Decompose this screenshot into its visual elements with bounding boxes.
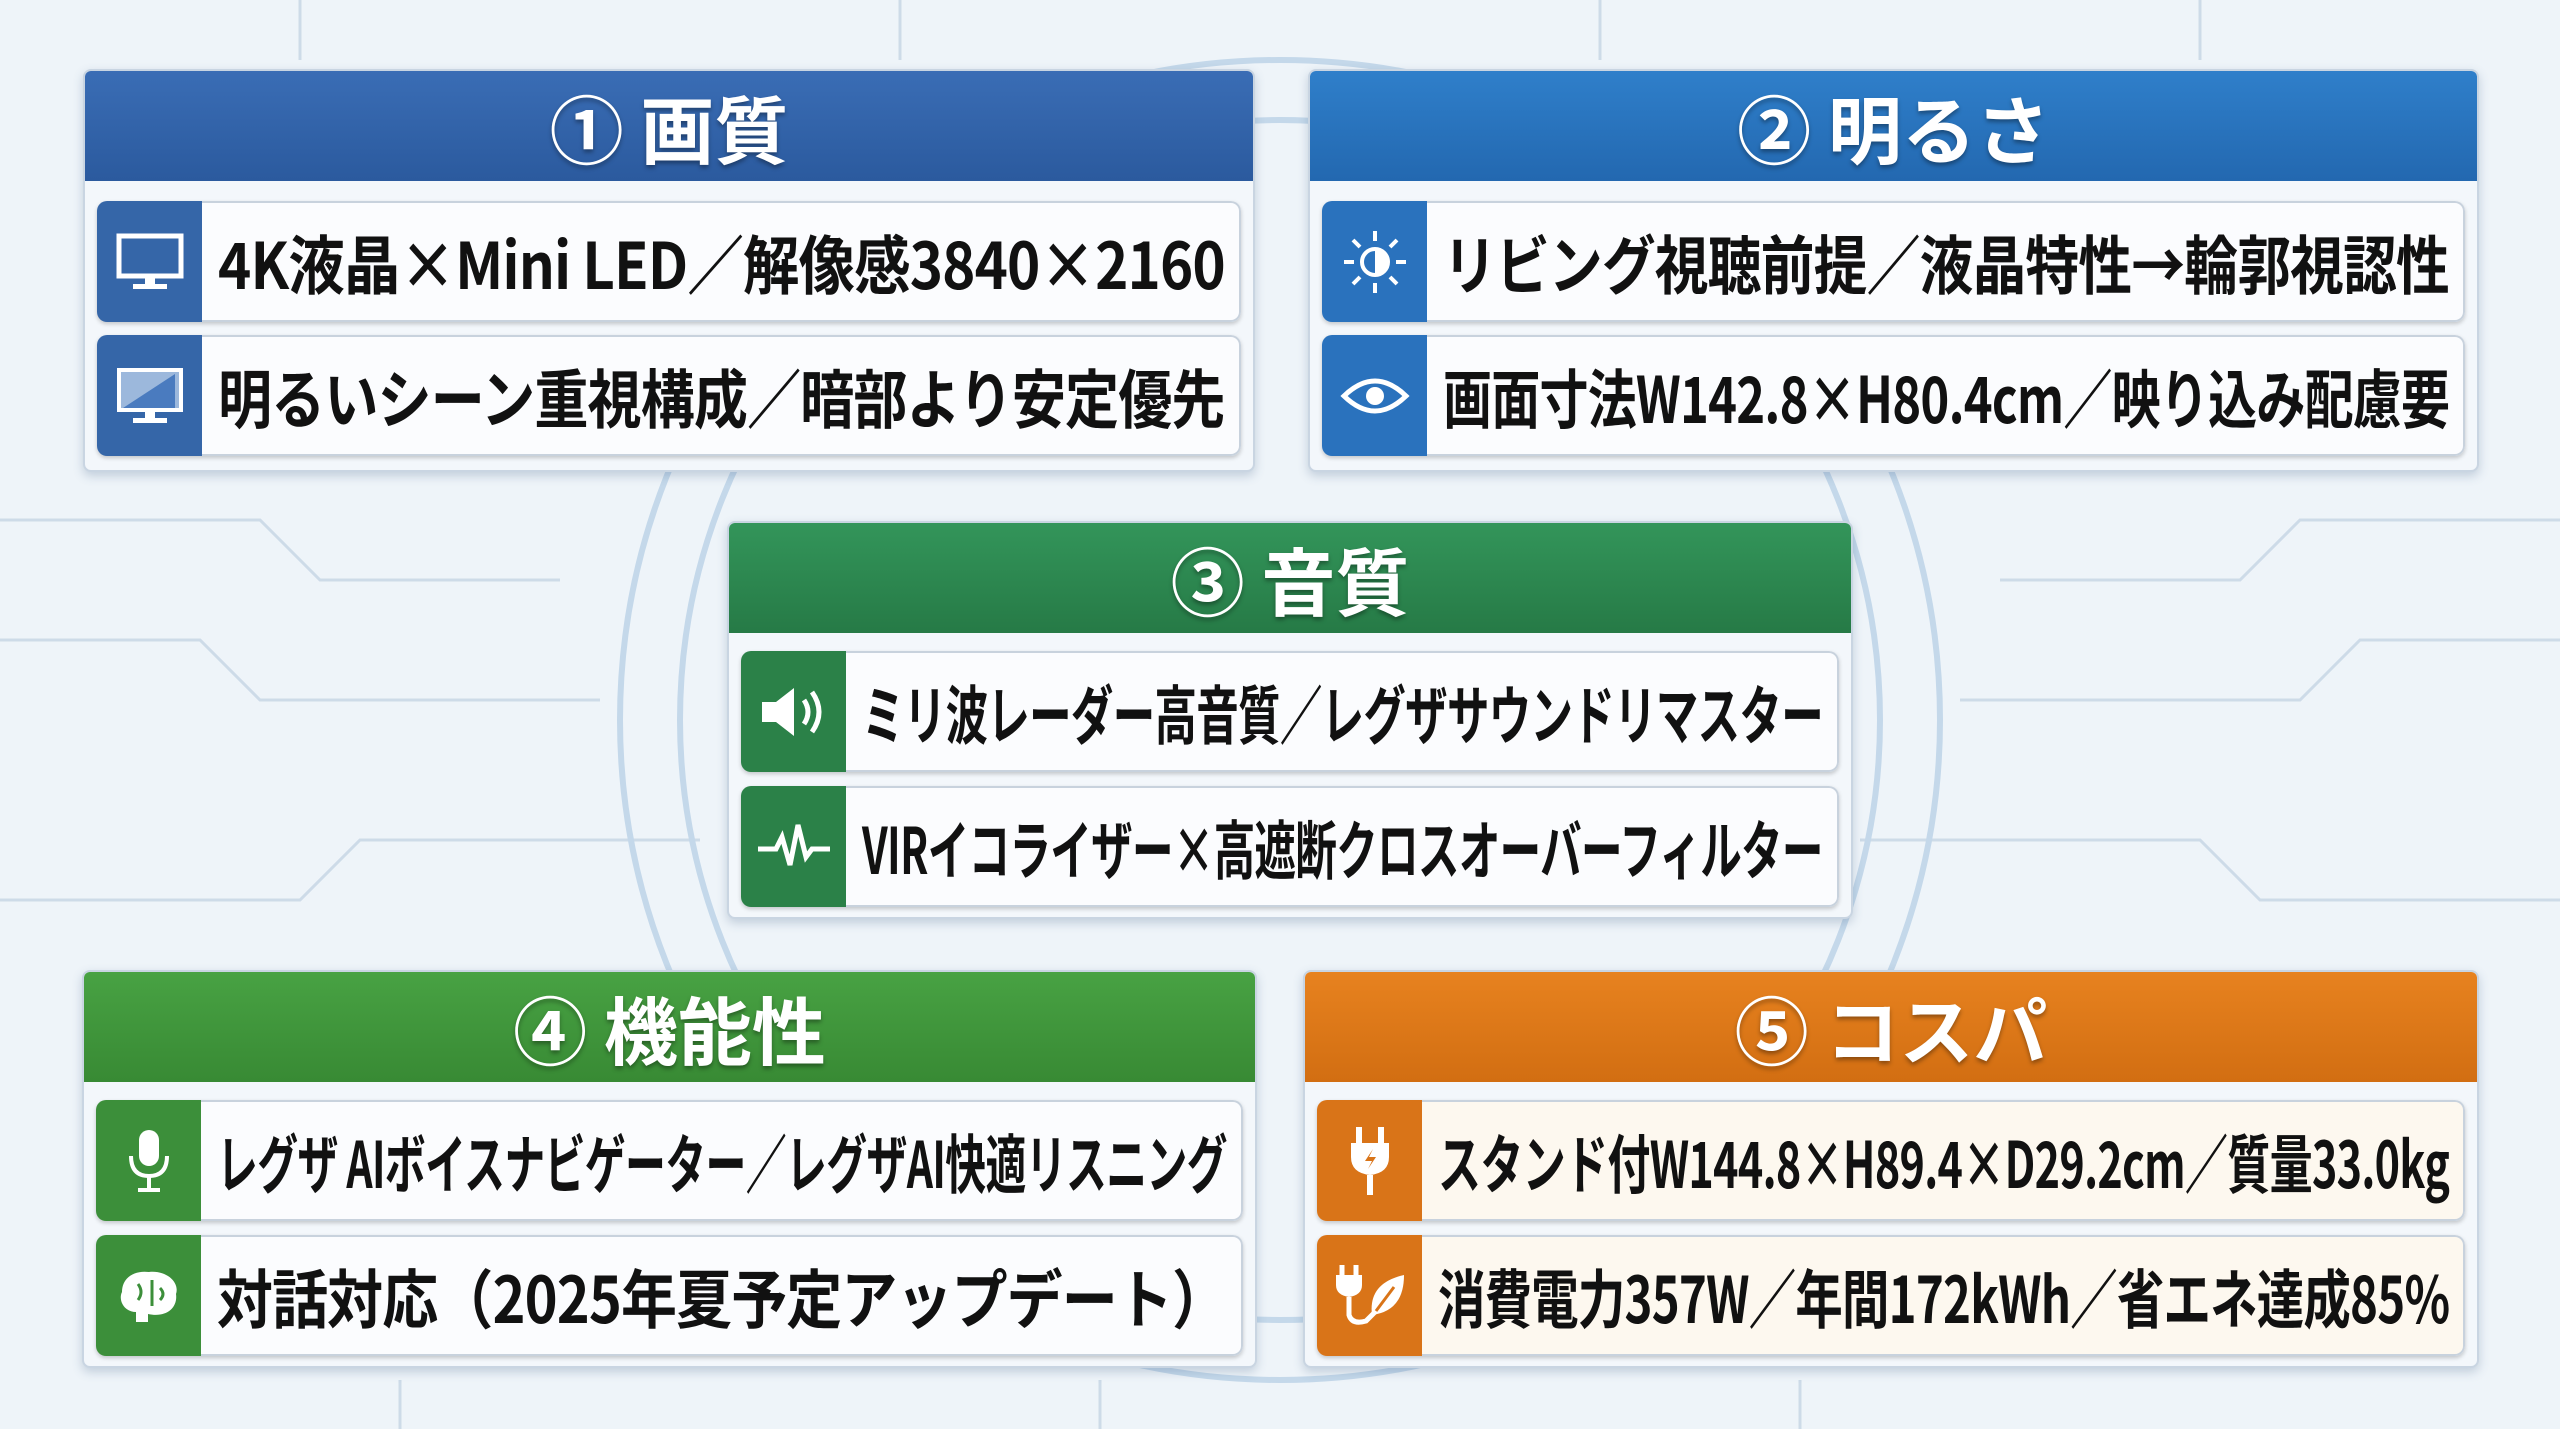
heading: ⑤ コスパ [1305, 972, 2477, 1082]
row: ミリ波レーダー: ミリ波レーダー高音質／レグザサウンドリマスター [862, 666, 1823, 758]
heading: ① 画質 [85, 71, 1253, 181]
row: 明るいシーン: 明るいシーン重視構成／暗部より安定優先 [218, 350, 1225, 442]
row: 対話対応 [96, 1235, 1243, 1356]
row: レグザAIボイスナビゲーター: レグザ AIボイスナビゲーター／レグザAI快適リスニング [217, 1114, 1227, 1206]
row: スタンド付 [1317, 1100, 2465, 1221]
panel: ④ 機能性 [82, 970, 1257, 1368]
heading: ② 明るさ: ② 明るさ [1737, 72, 2050, 180]
heading: ② 明るさ [1310, 71, 2477, 181]
heading: ⑤ コスパ: ⑤ コスパ [1735, 974, 2047, 1080]
row: 消費電力: 消費電力357W／年間172kWh／省エネ達成85% [1438, 1250, 2449, 1342]
heading: ③ 音質: ③ 音質 [1171, 524, 1409, 632]
row: リビング視聴: リビング視聴前提／液晶特性→輪郭視認性 [1443, 216, 2449, 308]
row: リビング視聴 [1322, 201, 2465, 322]
heading: ③ 音質 [729, 523, 1851, 633]
heading: ① 画質: ① 画質 [550, 72, 788, 180]
row: 4K液晶: 4K液晶×Mini LED／解像感3840×2160 [218, 216, 1225, 308]
row: 明るいシーン [97, 335, 1241, 456]
row: VIRイコライザー: VIRイコライザー×高遮断クロスオーバーフィルター [862, 800, 1823, 892]
row: レグザAIボイスナビゲーター [96, 1100, 1243, 1221]
row: スタンド付: スタンド付W144.8×H89.4×D29.2cm／質量33.0kg [1438, 1114, 2449, 1206]
row: 画面寸法 [1322, 335, 2465, 456]
row: ミリ波レーダー [741, 651, 1839, 772]
row: 画面寸法: 画面寸法W142.8×H80.4cm／映り込み配慮要 [1443, 350, 2449, 442]
panel: ① 画質 [83, 69, 1255, 472]
panel: ③ 音質 [727, 521, 1853, 919]
row: 消費電力 [1317, 1235, 2465, 1356]
panel: ⑤ コスパ [1303, 970, 2479, 1368]
row: 4K液晶 [97, 201, 1241, 322]
heading: ④ 機能性: ④ 機能性 [513, 974, 826, 1080]
heading: ④ 機能性 [84, 972, 1255, 1082]
panel: ② 明るさ [1308, 69, 2479, 472]
row: VIRイコライザー [741, 786, 1839, 907]
row: 対話対応: 対話対応（2025年夏予定アップデート） [217, 1250, 1227, 1342]
